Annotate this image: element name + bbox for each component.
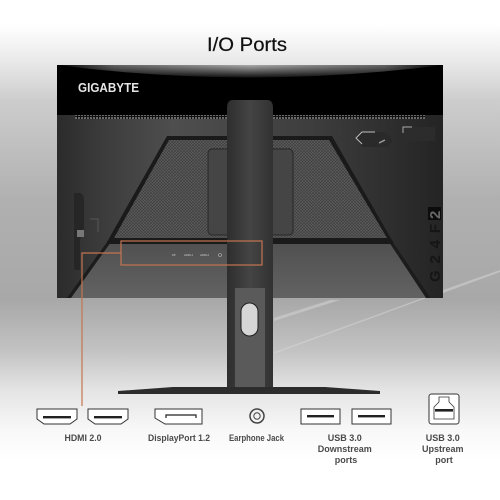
icon: HDMI 2: [88, 409, 128, 424]
label: USB upstream: port: [435, 455, 453, 465]
title: I/O Ports: [207, 35, 287, 56]
centre mounting plate: [208, 149, 293, 235]
stand: [118, 100, 380, 394]
stand base: [118, 387, 380, 394]
icon: USB downstream 1: [301, 409, 340, 424]
icon: USB downstream 2: [352, 409, 391, 424]
cable hole: [241, 303, 258, 336]
icon: USB upstream: [429, 394, 459, 424]
lower panel: [69, 242, 431, 298]
left side controls: [72, 193, 98, 270]
diagonal dark trims: [67, 242, 431, 298]
port labels: [172, 253, 222, 257]
label: USB upstream: Upstream: [422, 444, 464, 454]
label: USB upstream: USB 3.0: [426, 433, 460, 443]
leader line: [82, 253, 121, 406]
icon: earphone jack: [250, 409, 264, 423]
icon: DisplayPort: [155, 409, 202, 424]
port labels: [64, 433, 466, 465]
label: HDMI: HDMI 2.0: [64, 433, 102, 443]
label: DisplayPort: DisplayPort 1.2: [148, 433, 210, 443]
monitor back: [57, 65, 444, 298]
icon: HDMI 1: [37, 409, 77, 424]
port labels: HDMI-1: [184, 253, 193, 257]
vent dots: [75, 115, 425, 119]
neck inner panel: [235, 288, 265, 387]
highlight box: [121, 241, 262, 265]
brand logo: GIGABYTE: [78, 81, 139, 95]
label: USB downstream: ports: [335, 455, 357, 465]
label: USB downstream: Downstream: [318, 444, 372, 454]
label: earphone: Earphone Jack: [229, 433, 285, 443]
mesh panel: [107, 136, 393, 242]
model label: 2: [427, 211, 444, 219]
monitor shell: [57, 65, 443, 298]
label: USB downstream: USB 3.0: [328, 433, 362, 443]
model label: G24F: [427, 224, 444, 282]
top black band: [57, 65, 443, 115]
icons: [37, 394, 459, 424]
right side ornament: [356, 127, 435, 147]
port labels: HDMI-2: [200, 253, 209, 257]
stand neck: [227, 100, 273, 387]
port labels: DP: [172, 253, 176, 257]
highlight connector: [82, 241, 262, 406]
